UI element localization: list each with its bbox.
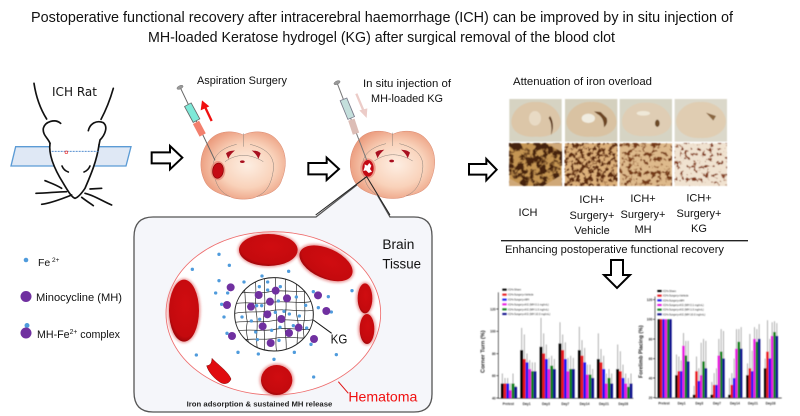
axis tick labels (490, 307, 628, 406)
label: Hematoma: Hematoma (348, 389, 418, 405)
arrow: withdrawal (201, 100, 212, 121)
chart legend: ICH+Surgery+Vehicle (508, 293, 534, 297)
title: Postoperative functional recovery after intracerebral haemorrhage (ICH) can be improved by in situ injection of (31, 9, 734, 26)
heading: attenuation of iron overload: Attenuation of iron overload (513, 76, 652, 88)
purple minocycline particles (223, 283, 330, 347)
chart: corner turn (481, 288, 633, 406)
axis tick labels: Day21 (599, 402, 609, 406)
axis tick labels: Day3 (695, 402, 703, 406)
group labels (519, 192, 721, 237)
arrow: rat to surgery (152, 146, 182, 169)
axis tick labels: 120 (647, 298, 652, 302)
label: ICH + Surgery + MH: Surgery+ (621, 209, 665, 221)
label: ICH + Surgery + MH: MH (634, 224, 652, 236)
arrow: to iron attenuation (469, 159, 497, 180)
brain: injection of KG (350, 131, 435, 198)
bars (658, 319, 778, 398)
legend: Minocycline: Minocycline (MH) (36, 292, 122, 304)
injection site marker (52, 151, 98, 154)
label: KG: KG (331, 331, 347, 346)
syringe: aspiration (176, 84, 215, 160)
axes (653, 297, 782, 398)
arrow: down to charts (604, 260, 630, 288)
label: in situ injection: MH-loaded KG (371, 93, 443, 105)
axis tick labels: 60 (649, 357, 652, 361)
label: ICH Rat: ICH Rat (52, 85, 97, 99)
callout background (134, 177, 432, 412)
chart legend: ICH+Surgery+KG (MH 0.1 mg/mL) (663, 303, 704, 307)
coronal plane slab (11, 147, 131, 166)
label: Brain Tissue (382, 237, 421, 271)
chart legend: ICH+Surgery+KG (MH 0.1 mg/mL) (508, 302, 549, 306)
label: ICH + Surgery + Vehicle: Surgery+ (570, 210, 614, 222)
axis tick labels: Day28 (766, 402, 776, 406)
label: ICH + Surgery + KG (677, 192, 721, 235)
label: ICH: ICH (519, 207, 538, 219)
brain: aspiration surgery (201, 132, 285, 199)
caption: iron adsorption: Iron adsorption & sustained MH release (187, 402, 332, 409)
chart: forelimb placing (638, 289, 782, 406)
axis tick labels: Pretest (658, 402, 671, 406)
label: Aspiration Surgery: Aspiration Surgery (197, 75, 287, 87)
title (31, 9, 734, 46)
label: ICH + Surgery + Vehicle (570, 194, 614, 237)
axis tick labels (647, 298, 776, 406)
label: in situ injection (363, 78, 452, 105)
iron-stained micrographs (509, 143, 727, 186)
histology photo grid (509, 99, 727, 186)
surgery step illustrations (176, 80, 435, 215)
chart legend (657, 289, 705, 316)
axis tick labels: Pretest (503, 402, 515, 406)
axis tick labels: Day28 (618, 402, 628, 406)
label: ICH + Surgery + Vehicle: ICH+ (579, 194, 605, 206)
whole-brain slices (509, 99, 727, 142)
y-axis title: Corner Turn (%) (481, 330, 487, 373)
bars (501, 318, 632, 398)
label: Brain Tissue: Tissue (382, 256, 421, 271)
callout pointer lines (316, 177, 390, 215)
axis tick labels: 20 (649, 396, 652, 400)
arrow: surgery to injection (308, 158, 339, 180)
heading: enhancing recovery: Enhancing postoperative functional recovery (505, 244, 725, 256)
axis tick labels: Day3 (542, 402, 550, 406)
axis tick labels: Day7 (561, 402, 569, 406)
legend: MH-Fe complex: complex (77, 329, 120, 341)
chart legend: ICH+Surgery+KG (MH 1.0 mg/mL) (663, 308, 704, 312)
axis tick labels: 40 (492, 396, 496, 400)
KG leader line (313, 320, 332, 333)
panel: hematoma detail callout (134, 177, 432, 412)
KG hydrogel mesh (235, 277, 313, 352)
legend: Fe: 2+ (52, 257, 60, 264)
title: MH-loaded Keratose hydrogel (KG) after surgical removal of the blood clot (148, 29, 616, 46)
chart legend: ICH+Sham (508, 288, 522, 292)
axis tick labels: 40 (649, 376, 652, 380)
axis tick labels: Day14 (730, 402, 740, 406)
axes (496, 292, 633, 398)
rat illustration (11, 83, 131, 206)
legend: MH-Fe complex (20, 323, 120, 341)
label: Brain Tissue: Brain (382, 237, 414, 252)
legend: MH-Fe complex: 2+ (70, 329, 77, 336)
chart legend: ICH+Surgery+Vehicle (663, 294, 689, 298)
axis tick labels: 120 (490, 307, 496, 311)
label: ICH + Surgery + Vehicle: Vehicle (574, 225, 610, 237)
axis tick labels: 60 (492, 374, 496, 378)
label: ICH + Surgery + KG: KG (691, 223, 707, 235)
red blood cells (167, 233, 376, 397)
axis tick labels: Day1 (678, 402, 686, 406)
arrow: injection direction (356, 94, 367, 118)
syringe: injection (333, 80, 367, 160)
axis tick labels: 100 (647, 318, 652, 322)
legend: Fe: Fe (38, 257, 50, 269)
legend (20, 257, 122, 341)
axis tick labels: 100 (490, 330, 496, 334)
chart legend: ICH+Surgery+MH (663, 298, 684, 302)
axis tick labels: 80 (649, 337, 652, 341)
blue Fe ions (191, 253, 354, 379)
label: ICH + Surgery + MH: ICH+ (630, 193, 656, 205)
legend: Fe (24, 257, 60, 269)
chart legend: ICH+Surgery+MH (508, 298, 529, 302)
chart legend: ICH+Surgery+KG (MH 10.0 mg/mL) (663, 312, 705, 316)
chart legend (502, 288, 550, 316)
chart legend: ICH+Sham (663, 289, 677, 293)
hematoma leader line (338, 382, 348, 393)
axis tick labels: Day7 (713, 402, 721, 406)
legend: MH-Fe complex: MH-Fe (37, 329, 71, 341)
axis tick labels: Day1 (523, 402, 531, 406)
label: ICH + Surgery + KG: Surgery+ (677, 208, 721, 220)
axis tick labels: 80 (492, 352, 496, 356)
chart legend: ICH+Surgery+KG (MH 1.0 mg/mL) (508, 307, 549, 311)
label: ICH + Surgery + KG: ICH+ (686, 192, 712, 204)
hematoma boundary (166, 232, 381, 395)
axis tick labels: Day21 (748, 402, 758, 406)
axis tick labels: Day14 (580, 402, 590, 406)
y-axis title: Forelimb Placing (%) (638, 325, 644, 378)
rat head outline (34, 83, 113, 206)
chart legend: ICH+Surgery+KG (MH 10.0 mg/mL) (508, 312, 550, 316)
label: in situ injection: In situ injection of (363, 78, 452, 90)
label: ICH + Surgery + MH (621, 193, 665, 236)
